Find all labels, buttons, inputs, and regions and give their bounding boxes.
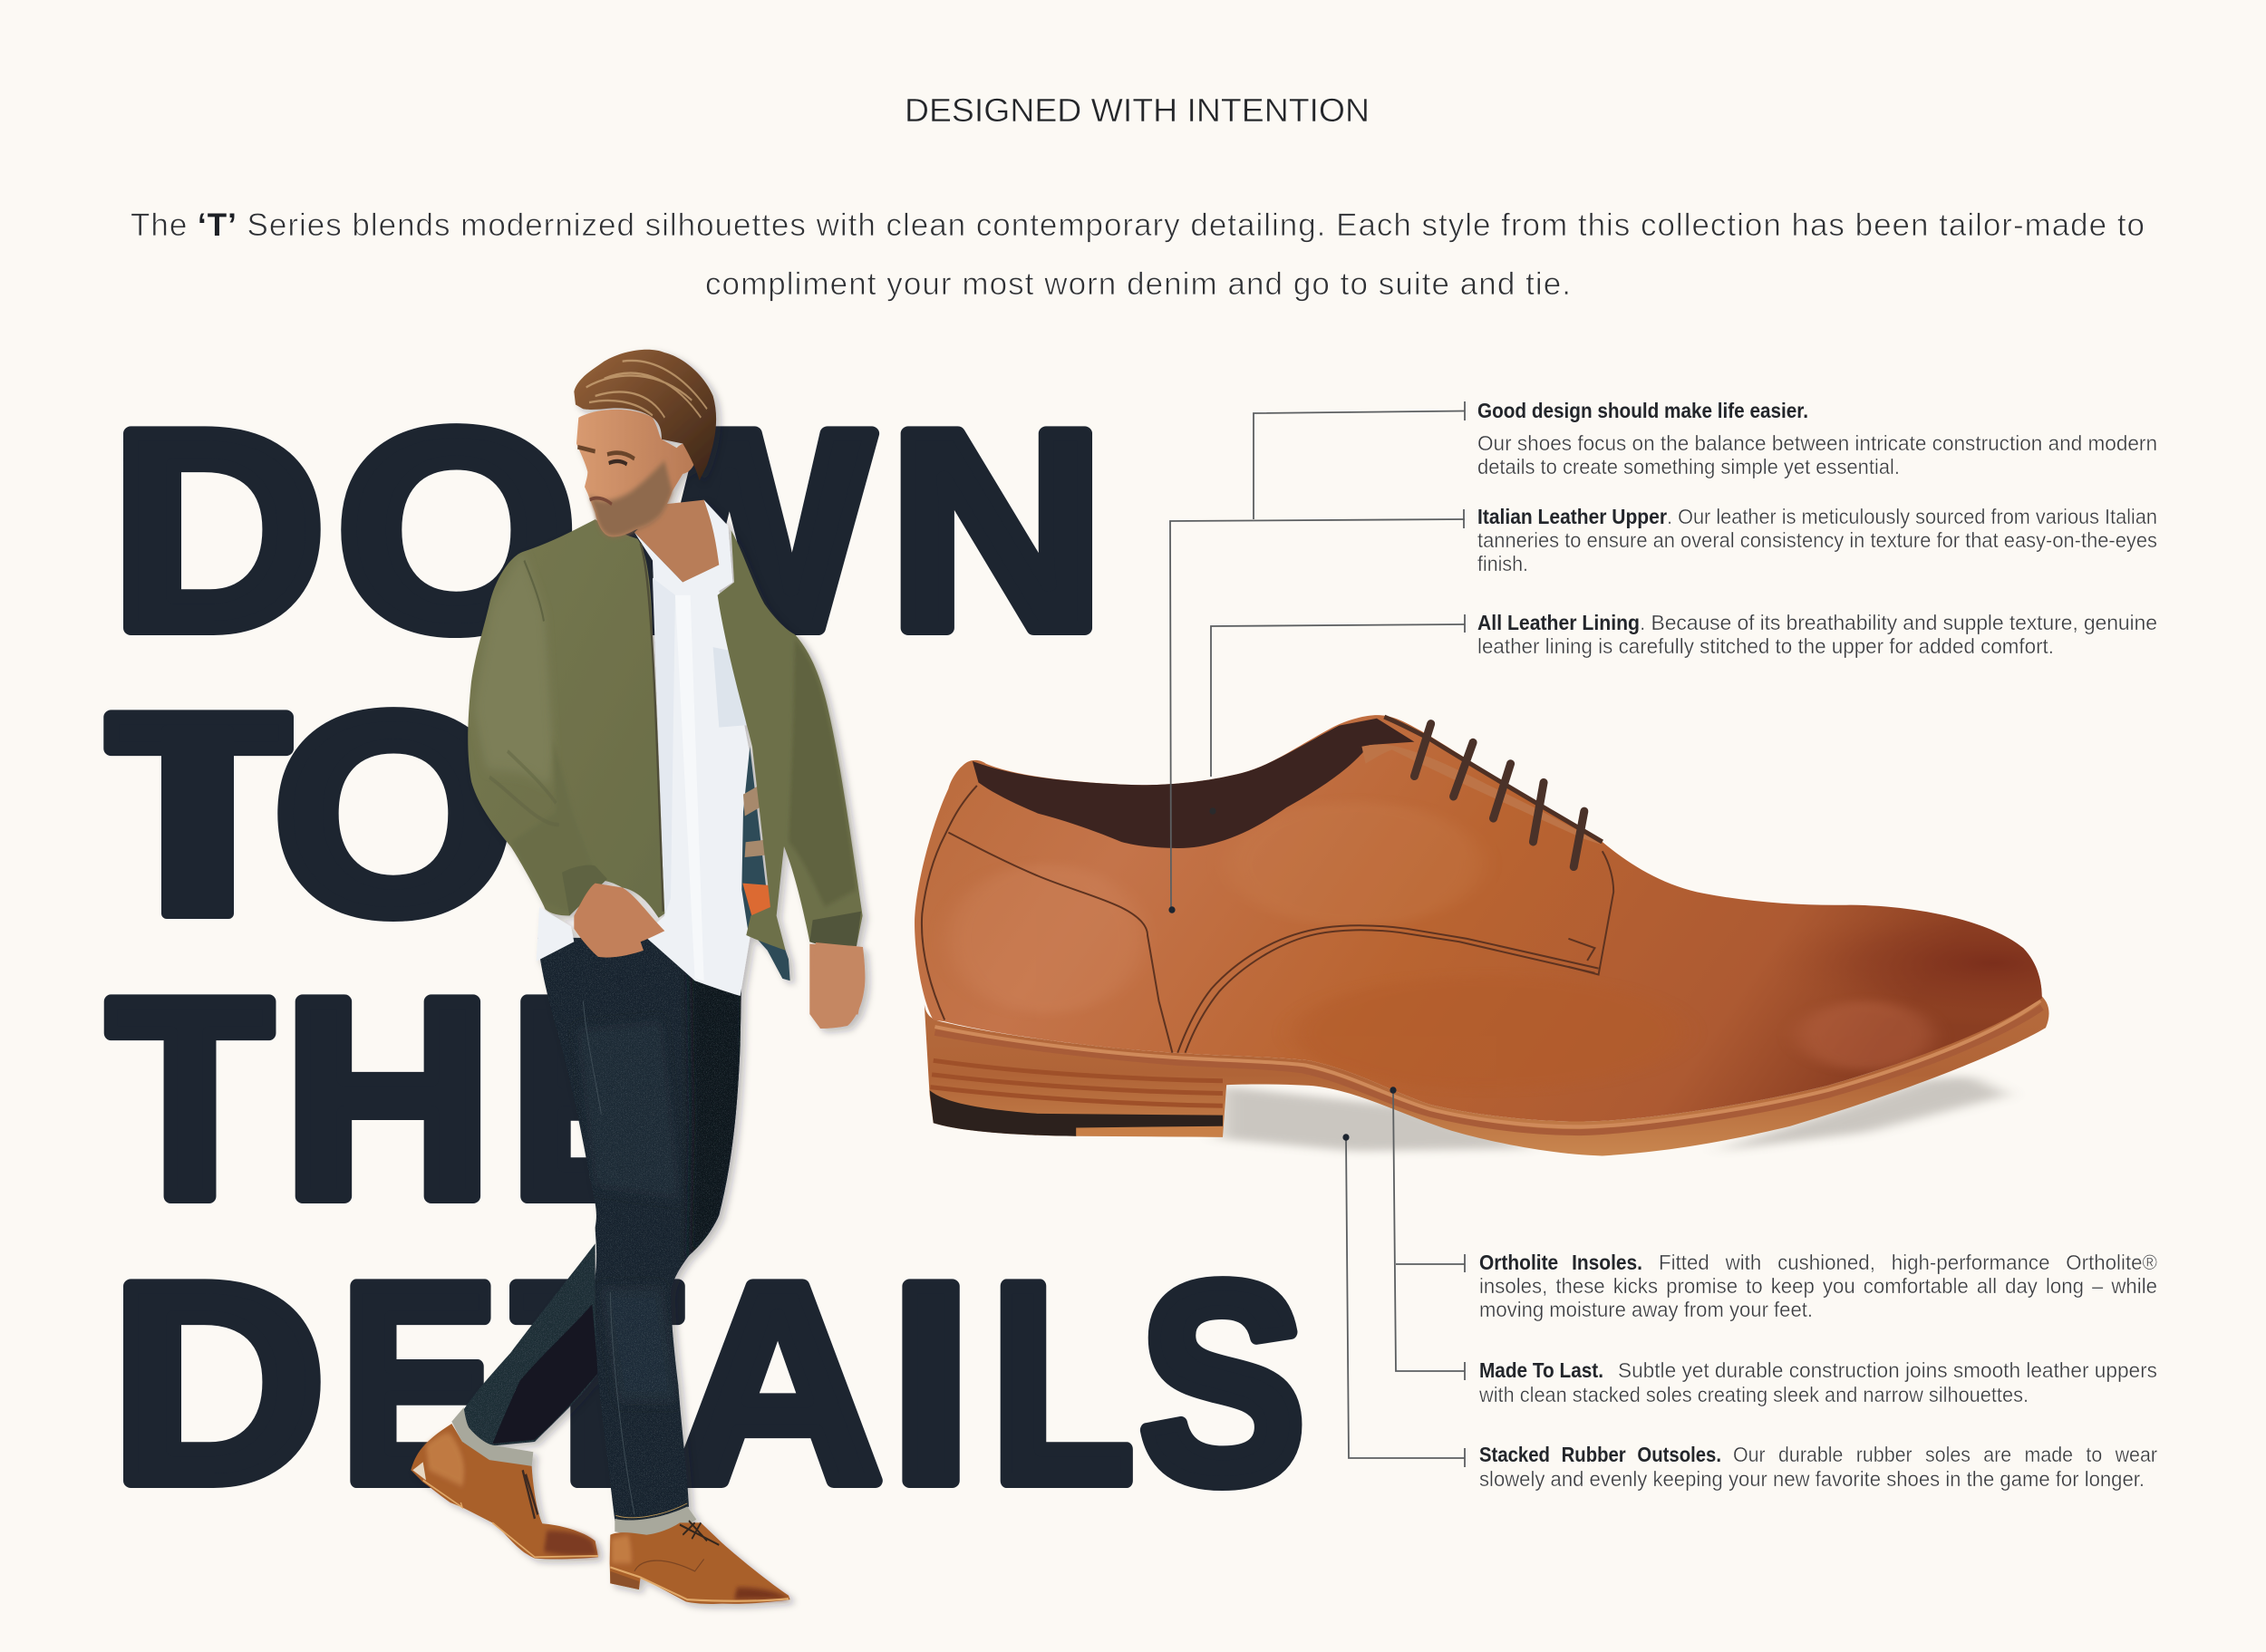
callout: all leather lining: [1477, 611, 2157, 658]
stitching: [922, 786, 1613, 1053]
headline: DETAILS: A: [673, 1225, 883, 1541]
headline: DOWN: O: [336, 373, 577, 689]
callout: ortholite insoles: Ortholite Insoles.: [1479, 1251, 1642, 1274]
headline: DETAILS: E: [341, 1225, 499, 1541]
callout: all leather lining: . Because of its breathability and supple texture, genuine: [1640, 611, 2157, 634]
lining: [741, 747, 790, 981]
callout: made to last: with clean stacked soles creating sleek and narrow silhouettes.: [1478, 1383, 2029, 1406]
callout: ortholite insoles: moving moisture away from your feet.: [1479, 1298, 1813, 1321]
jacket left panel: [468, 519, 664, 918]
callout: good design: details to create something simple yet essential.: [1477, 455, 1900, 478]
leader: stacked rubber outsoles, with pointer dot: [1342, 1134, 1465, 1467]
upper body: [468, 350, 863, 1015]
callout: all leather lining: leather lining is carefully stitched to the upper for added comfort.: [1477, 634, 2054, 658]
callout: good design: Our shoes focus on the balance between intricate construction and modern: [1477, 431, 2157, 455]
callout: stacked rubber outsoles: slowely and evenly keeping your new favorite shoes in the game for longer.: [1479, 1467, 2145, 1491]
sole and stacked heel: [925, 993, 2049, 1155]
upper: [915, 715, 2042, 1122]
jeans and cuffs: [451, 938, 743, 1540]
headline: THE: H: [283, 941, 492, 1256]
headline: DOWN: W: [587, 372, 875, 689]
callout: stacked rubber outsoles: [1479, 1443, 2157, 1491]
heel top-lift: [930, 1090, 1223, 1136]
headline: DOWN: D: [111, 372, 325, 688]
callout: ortholite insoles: insoles, these kicks promise to keep you comfortable all day long – while: [1479, 1274, 2157, 1298]
callout: made to last: [1478, 1358, 2157, 1406]
hair: [574, 350, 716, 480]
intro paragraph: The ‘T’ Series blends modernized silhouettes with clean contemporary detailing. Each style from this collection has been tailor-made to: [131, 208, 2145, 243]
callout: good design: Good design should make life easier.: [1477, 399, 1808, 422]
headline: DETAILS: L: [991, 1224, 1134, 1541]
callout: italian leather upper: tanneries to ensure an overal consistency in texture for that easy-on-the-eyes: [1477, 528, 2157, 552]
intro paragraph: compliment your most worn denim and go to suite and tie.: [705, 266, 1571, 302]
leader: all leather lining, with pointer dot: [1209, 614, 1465, 815]
headline: TO: O: [273, 655, 515, 972]
headline: DETAILS: I: [890, 1226, 972, 1541]
leader: good design callout: [1254, 401, 1465, 519]
callout: italian leather upper: [1477, 505, 2157, 575]
featured brown leather shoe: [915, 715, 2061, 1155]
eyestay: [1361, 744, 1603, 845]
lining: [973, 719, 1414, 848]
intro paragraph: [131, 208, 2145, 302]
callout: made to last: Subtle yet durable construction joins smooth leather uppers: [1618, 1358, 2157, 1382]
headline: DOWN: [111, 372, 1105, 689]
back-leg shoe and front-leg shoe: [411, 1424, 790, 1604]
jacket right panel: [718, 530, 863, 951]
neck and face: [634, 500, 719, 582]
shirt: [634, 500, 750, 996]
headline: DETAILS: S: [1139, 1226, 1305, 1541]
heading: designed with intention: DESIGNED WITH INTENTION: [905, 92, 1370, 129]
callout: italian leather upper: finish.: [1477, 552, 1528, 575]
hands: [574, 884, 664, 958]
headline: DETAILS: [111, 1224, 1305, 1541]
lower hand: [810, 942, 865, 1029]
callout: italian leather upper: . Our leather is meticulously sourced from various Italian: [1667, 505, 2157, 528]
leader: ortholite insoles and made to last, with pointer dot: [1390, 1087, 1465, 1380]
headline: THE: E: [509, 942, 682, 1257]
callout: stacked rubber outsoles: Our durable rubber soles are made to wear: [1733, 1443, 2157, 1466]
shoe shadow: [1219, 1077, 2009, 1151]
headline: DOWN: N: [888, 373, 1105, 689]
callout: italian leather upper: Italian Leather Upper: [1477, 505, 1667, 528]
callout: good design: [1477, 399, 2157, 478]
callout: all leather lining: All Leather Lining: [1477, 611, 1640, 634]
headline: TO: T: [108, 655, 289, 971]
headline: THE: [108, 941, 682, 1257]
headline: THE: T: [108, 942, 272, 1257]
callout: stacked rubber outsoles: Stacked Rubber Outsoles.: [1479, 1443, 1721, 1466]
figure: man walking in green jacket and jeans: [411, 350, 865, 1604]
headline: DETAILS: T: [513, 1226, 681, 1541]
callout: ortholite insoles: Fitted with cushioned, high-performance Ortholite®: [1659, 1251, 2157, 1274]
callout: made to last: Made To Last.: [1479, 1358, 1603, 1382]
leader: italian leather upper, with pointer dot: [1168, 509, 1465, 913]
headline: TO: [108, 655, 515, 972]
laces: [1414, 724, 1584, 867]
headline: DETAILS: D: [111, 1224, 325, 1541]
callout: ortholite insoles: [1479, 1251, 2157, 1321]
